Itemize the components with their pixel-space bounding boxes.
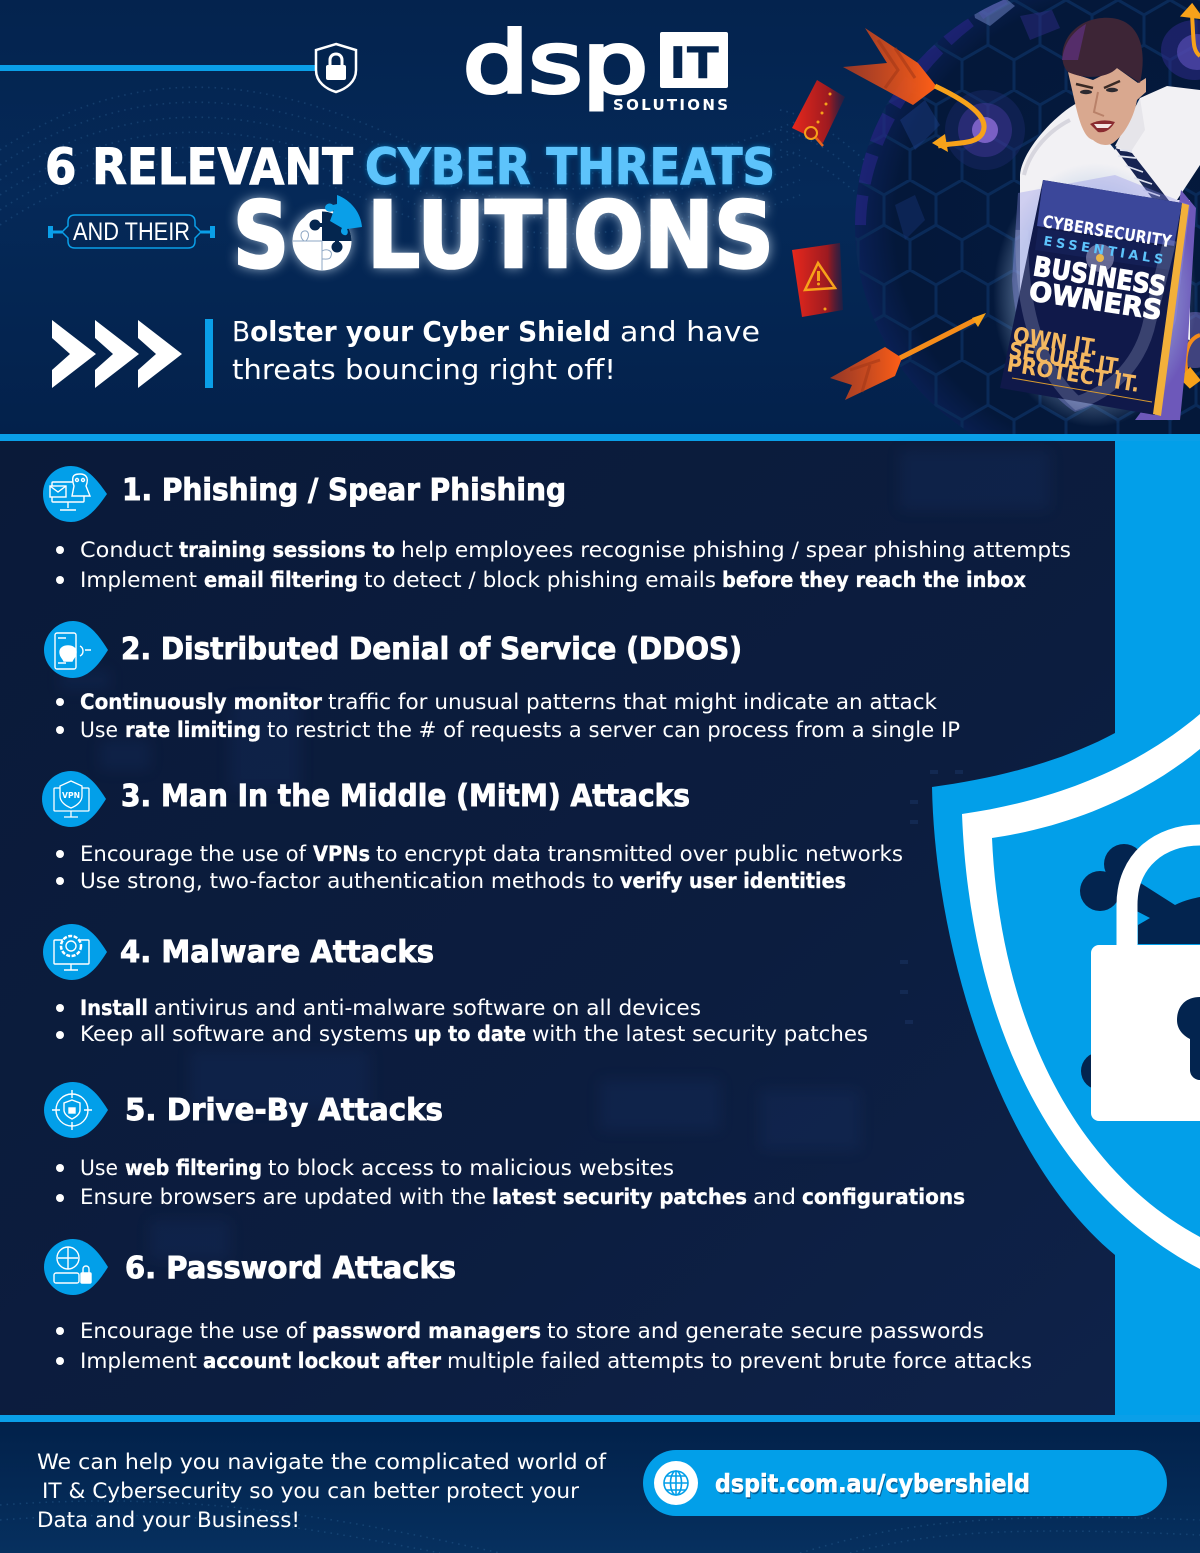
icon: red tablet with magnifier [792,80,845,146]
bullets 2 [56,690,960,742]
bullets 3: verify user identities [620,869,846,893]
icon: globe [654,1461,698,1505]
title line 1: 6 RELEVANT [45,138,353,196]
title solutions: S [233,182,289,289]
and their tag [48,215,215,248]
and their tag: AND THEIR [73,218,190,246]
tagline: and have [620,315,760,348]
threat 3: MitM [42,771,903,893]
icon: VPN shield [42,771,106,827]
tagline [232,315,760,386]
heading 6: 6. Password Attacks [125,1251,456,1286]
book cover: OWN IT. [1011,323,1100,361]
bullets 4: Keep all software and systems [80,1022,408,1046]
bullets 3: VPNs [313,842,370,866]
icon: phishing [43,466,107,522]
title solutions: LUTIONS [367,182,774,289]
heading 1: 1. Phishing / Spear Phishing [122,473,566,508]
footer text [37,1450,607,1532]
bullets 6: account lockout after [203,1349,442,1373]
bullets 5: web filtering [125,1156,262,1180]
large shield and padlock [932,714,1200,1269]
url pill button: dspit.com.au/cybershield [716,1471,1031,1500]
bullets 2: Use [80,718,118,742]
threat 5: drive-by [44,1082,965,1209]
bullets 5: to block access to malicious websites [268,1156,674,1180]
title solutions: S [232,182,290,289]
threat 1: phishing [43,466,1071,592]
target rings [945,20,1200,368]
arrow bottom [830,313,986,400]
icon: target lock [44,1082,108,1138]
threat 2: DDOS [44,621,960,742]
logo: dsp IT Solutions: dsp [463,14,648,112]
arrows right [1182,6,1200,386]
title line 1 [45,138,775,196]
icon: VPN shield: VPN [62,791,80,800]
sphere [850,0,1200,470]
header panel [0,0,1200,470]
logo: dsp IT Solutions [463,14,728,114]
bullets 4 [56,996,868,1046]
icon: red phone with warning [792,243,843,317]
footer panel [0,1422,1200,1553]
title solutions: LUTIONS [366,182,775,289]
glowing shield behind book [993,163,1197,427]
book cover: CYBERSECURITY [1041,212,1173,252]
bullets 6 [56,1319,1032,1373]
bullets 4: Install [80,996,148,1020]
threat 4: malware [43,924,868,1046]
illustration: sphere, arrows, person and book [792,0,1200,470]
main panel [0,441,1200,1415]
bullets 1: to detect / block phishing emails [364,568,716,592]
bullets 5: and [753,1185,796,1209]
person [1020,18,1200,420]
bullets 2: rate limiting [125,718,261,742]
bullets 1: Implement [80,568,197,592]
bullets 3: Encourage the use of [80,842,307,866]
footer text: IT & Cybersecurity so you can better protect your [42,1479,579,1503]
bullets 1: training sessions to [179,538,395,562]
bullets 3: to encrypt data transmitted over public networks [376,842,903,866]
bullets 2: Continuously monitor [80,690,323,714]
url pill button: dspit.com.au/cybershield [715,1469,1030,1498]
chevrons [52,320,182,388]
top accent bar [0,434,1200,441]
title solutions: O [295,195,349,288]
bullets 6: to store and generate secure passwords [547,1319,984,1343]
book cover: PROTECT IT. [1005,352,1141,398]
bullets 5: latest security patches [492,1185,747,1209]
bullets 6: password managers [312,1319,541,1343]
bullets 5: Use [80,1156,118,1180]
heading 3: 3. Man In the Middle (MitM) Attacks [121,779,690,814]
icon: DDOS skull [44,621,108,678]
bullets 4: antivirus and anti-malware software on all devices [154,996,701,1020]
title line 1: CYBER THREATS [365,138,775,196]
book cover: SECURE IT. [1007,338,1124,381]
bullets 5 [56,1156,965,1209]
icon: password lock [44,1239,108,1295]
heading 5: 5. Drive-By Attacks [125,1093,443,1128]
bullets 6: Implement [80,1349,197,1373]
bullets 5: Ensure browsers are updated with the [80,1185,486,1209]
footer text: Data and your Business! [37,1508,300,1532]
divider bar [205,319,213,388]
bullets 1: Conduct [80,538,173,562]
heading 2: 2. Distributed Denial of Service (DDOS) [121,632,742,667]
book cover: BUSINESS [1031,251,1168,303]
icon: malware gear [43,924,107,980]
bullets 3 [56,842,903,893]
url pill button [643,1450,1167,1516]
bullets 1 [56,538,1071,592]
bottom accent bar [0,1415,1200,1422]
bullets 2: to restrict the # of requests a server can process from a single IP [267,718,960,742]
line and shield badge [0,44,356,92]
bullets 4: up to date [414,1022,526,1046]
bullets 6: Encourage the use of [80,1319,307,1343]
bullets 2: traffic for unusual patterns that might indicate an attack [328,690,938,714]
tagline: threats bouncing right off! [232,353,616,386]
icon: puzzle O [292,195,362,271]
logo: dsp IT Solutions: IT [669,38,719,89]
bullets 1: help employees recognise phishing / spear phishing attempts [401,538,1071,562]
book cover [1000,180,1189,416]
bullets 1: before they reach the inbox [722,568,1026,592]
bullets 4: with the latest security patches [532,1022,868,1046]
book cover: ESSENTIALS [1042,234,1164,268]
footer text: We can help you navigate the complicated world of [37,1450,607,1474]
title line 1: CYBER THREATS [365,138,775,196]
threat 6: password [44,1239,1032,1373]
arrow top [843,28,984,152]
tagline: Bolster your Cyber Shield [232,315,611,348]
logo: dsp IT Solutions: SOLUTIONS [613,96,728,114]
bullets 5: configurations [802,1185,965,1209]
bullets 6: multiple failed attempts to prevent brute force attacks [447,1349,1032,1373]
book cover: OWNERS [1027,276,1164,327]
bullets 1: email filtering [204,568,358,592]
bullets 3: Use strong, two-factor authentication methods to [80,869,614,893]
heading 4: 4. Malware Attacks [120,935,434,970]
